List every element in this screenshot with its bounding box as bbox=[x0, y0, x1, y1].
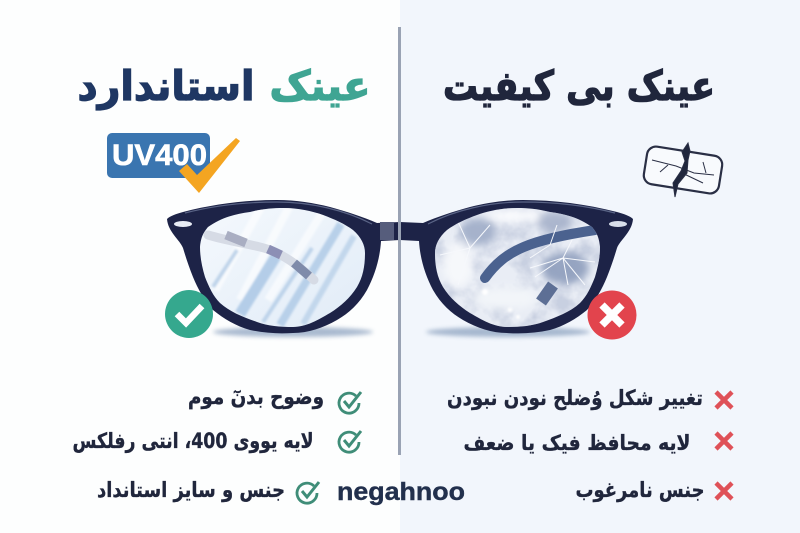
drawback: shape change: تغییر شکل وُضلح نودن نبودن bbox=[447, 386, 703, 410]
drawback: poor material: جنس نامرغوب bbox=[576, 478, 704, 502]
icon: red cross circle bbox=[588, 290, 636, 340]
divider line bbox=[398, 27, 401, 455]
icon: green check circle bbox=[165, 290, 213, 338]
list: poor quality glasses drawbacks bbox=[447, 386, 732, 502]
benefit: UV400 coating: لایه یووی 400، انتی رفلکس bbox=[73, 429, 314, 453]
benefit: clarity: وضوح بدنٓ موم bbox=[188, 385, 324, 409]
icon: check 3 bbox=[297, 482, 319, 503]
icon: check 2 bbox=[339, 431, 361, 452]
badge: UV400 with check: UV400 bbox=[112, 139, 207, 172]
heading: standard glasses: استاندارد bbox=[78, 62, 254, 110]
heading: poor quality glasses: عینک بی کیفیت bbox=[443, 62, 715, 110]
brand name: negahnoo bbox=[337, 478, 465, 506]
heading: standard glasses: عینک bbox=[270, 62, 370, 110]
panel: standard glasses background bbox=[0, 0, 400, 533]
glasses: poor quality lens side bbox=[400, 200, 633, 337]
icon: cross 2 bbox=[716, 433, 732, 449]
list: standard glasses benefits bbox=[73, 385, 361, 503]
badge: UV400 with check bbox=[107, 133, 240, 193]
panel: poor quality glasses background bbox=[400, 0, 800, 533]
icon: cross 1 bbox=[716, 392, 732, 408]
lens: clear bbox=[200, 208, 365, 327]
drawback: fake coating: لایه محافظ فیک یا ضعف bbox=[464, 431, 690, 455]
lens: smudged and scratched bbox=[435, 208, 600, 327]
glasses: standard lens side bbox=[167, 200, 400, 337]
heading: standard glasses bbox=[78, 62, 370, 110]
icon: cracked lens bbox=[642, 143, 724, 197]
icon: right frame rivet bbox=[609, 221, 627, 227]
icon: cross 3 bbox=[716, 483, 732, 499]
icon: check 1 bbox=[339, 392, 361, 413]
icon: left frame rivet bbox=[174, 221, 192, 227]
benefit: material and size: جنس و سایز استانداد bbox=[97, 478, 285, 502]
